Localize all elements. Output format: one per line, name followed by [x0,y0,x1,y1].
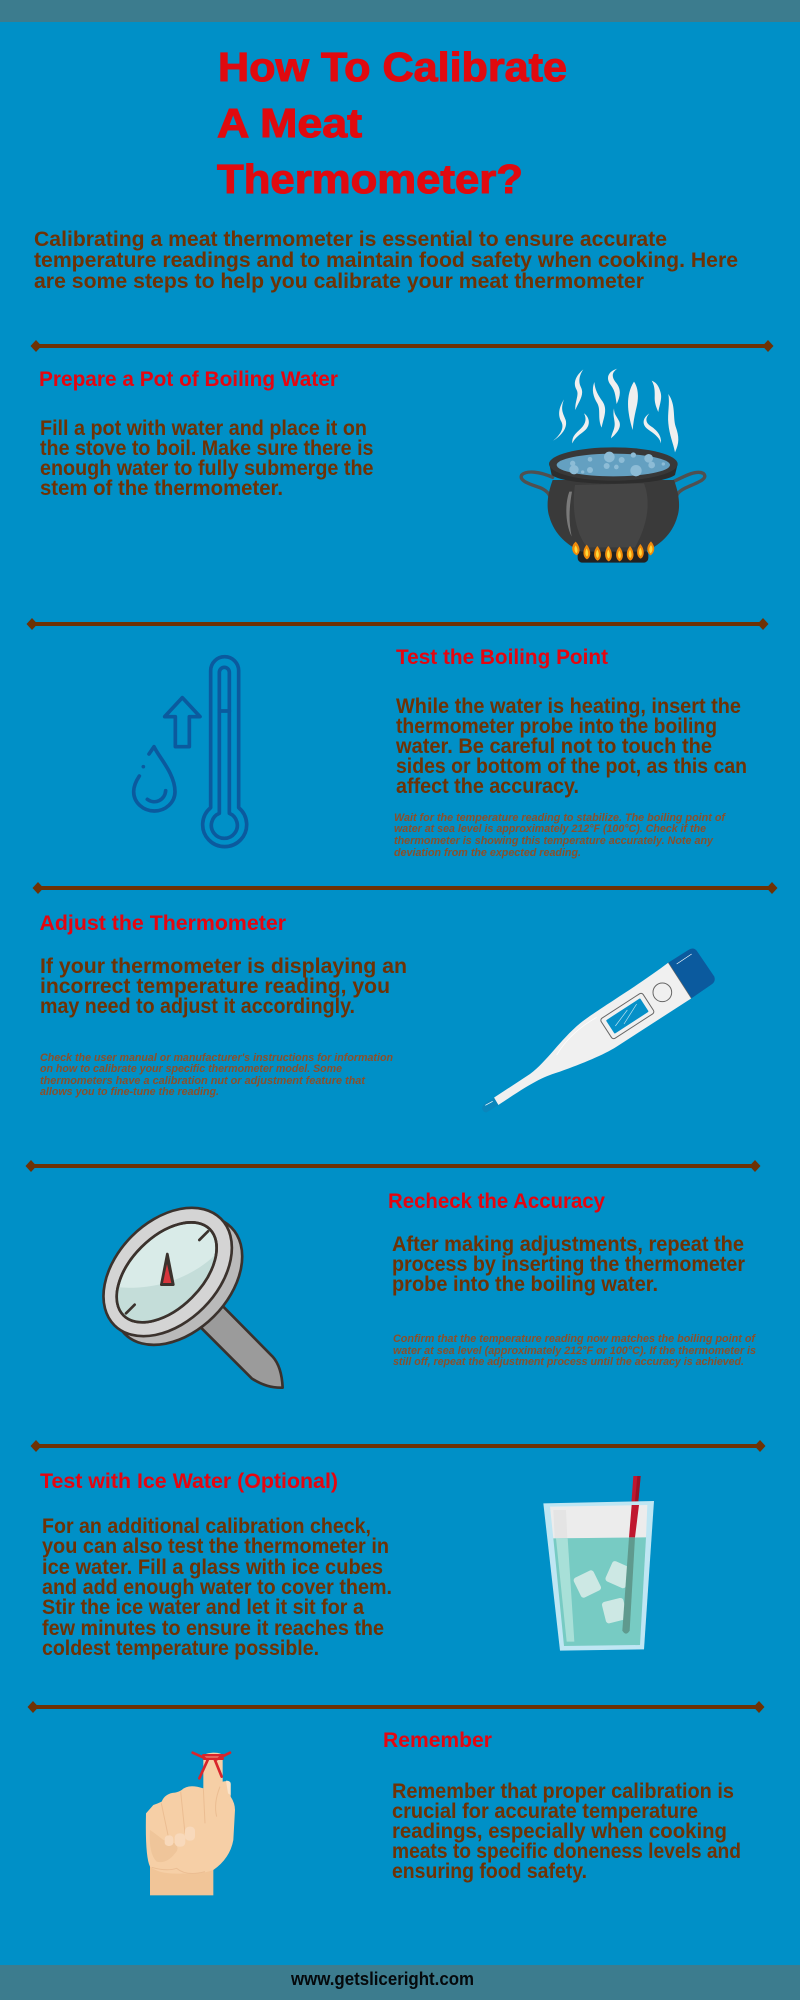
text block: step 3 body: If your thermometer is displaying an [40,955,407,978]
text block: step 4 small note: water at sea level (approximately 212°F or 100°C). If the thermometer is [393,1345,756,1357]
text block: step 6 body: readings, especially when cooking [392,1820,727,1843]
text block: step 5 body: few minutes to ensure it reaches the [42,1617,384,1640]
text block: step 2 small note: deviation from the expected reading. [394,847,581,859]
text block: step 4 body [392,1233,745,1296]
text block: step 4 small note [393,1333,756,1368]
text block: step 3 small note: Check the user manual or manufacturer's instructions for information [40,1052,393,1064]
panel: step 1 prepare boiling water [39,368,705,563]
text block: step 2 small note: thermometer is showing this temperature accurately. Note any [394,835,714,847]
text block: step 6 body [392,1780,741,1883]
text block: step 5 body: coldest temperature possible. [42,1637,319,1660]
heading: remember: Remember [383,1729,492,1752]
text block: step 6 body: Remember that proper calibration is [392,1780,734,1803]
text block: step 1 body: Fill a pot with water and place it on [40,417,367,440]
intro text [34,228,738,293]
icon: boiling pot [521,369,705,563]
text block: step 4 small note: still off, repeat the adjustment process until the accuracy is achieved. [393,1356,744,1368]
panel: step 6 remember [146,1729,741,1895]
icon: dial meat thermometer [102,1206,284,1389]
text block: step 2 body: affect the accuracy. [396,775,579,798]
text block: step 3 small note: allows you to fine-tune the reading. [40,1086,219,1098]
text block: step 3 body [40,955,407,1018]
text block: step 2 body: thermometer probe into the boiling [396,715,717,738]
text block: step 2 body: While the water is heating, insert the [396,695,741,718]
footer bar: www.getsliceright.com [290,1969,474,1989]
text block: step 5 body: you can also test the thermometer in [42,1535,389,1558]
text block: step 2 small note [394,812,726,859]
text block: step 1 body: the stove to boil. Make sure there is [40,437,374,460]
title: How To Calibrate [218,44,567,90]
text block: step 3 small note: thermometers have a calibration nut or adjustment feature that [40,1075,366,1087]
icon: hand with string on finger [146,1753,235,1895]
text block: step 5 body: ice water. Fill a glass with ice cubes [42,1556,383,1579]
text block: step 5 body: and add enough water to cover them. [42,1576,392,1599]
heading: test with ice water: Test with Ice Water (Optional) [40,1470,338,1493]
panel: step 2 test the boiling point [134,646,747,859]
text block: step 1 body: enough water to fully submerge the [40,457,374,480]
heading: test the boiling point: Test the Boiling Point [396,646,608,669]
footer bar [0,1965,800,2000]
heading: recheck the accuracy: Recheck the Accuracy [388,1190,605,1213]
icon: glass of ice water with straw [543,1476,654,1651]
panel: step 4 recheck the accuracy [79,1183,756,1388]
heading: prepare a pot: Prepare a Pot of Boiling Water [39,368,338,391]
text block: step 6 body: crucial for accurate temperature [392,1800,698,1823]
text block: step 2 small note: Wait for the temperature reading to stabilize. The boiling point of [394,812,726,824]
text block: step 2 body: sides or bottom of the pot, as this can [396,755,747,778]
text block: step 1 body [40,417,374,500]
title [217,44,567,202]
panel: step 5 test with ice water [40,1470,654,1660]
text block: step 4 small note: Confirm that the temperature reading now matches the boiling point of [393,1333,756,1345]
text block: step 2 body: water. Be careful not to touch the [395,735,712,758]
icon: digital thermometer [482,948,715,1112]
icon: thermometer with drop and arrow [134,657,247,847]
text block: step 4 body: After making adjustments, repeat the [392,1233,744,1256]
text block: step 5 body: Stir the ice water and let it sit for a [42,1596,364,1619]
text block: step 4 body: probe into the boiling water. [392,1273,658,1296]
title: A Meat [217,100,362,146]
panel: step 3 adjust the thermometer [40,912,715,1112]
text block: step 1 body: stem of the thermometer. [40,477,283,500]
text block: step 4 body: process by inserting the thermometer [392,1253,745,1276]
heading: adjust the thermometer: Adjust the Thermometer [40,912,286,935]
intro text: temperature readings and to maintain food safety when cooking. Here [34,249,738,272]
intro text: are some steps to help you calibrate your meat thermometer [34,270,644,293]
text block: step 6 body: ensuring food safety. [392,1860,587,1883]
text block: step 5 body [42,1515,392,1660]
title: Thermometer? [217,156,523,202]
text block: step 3 small note: on how to calibrate your specific thermometer model. Some [40,1063,342,1075]
text block: step 6 body: meats to specific doneness levels and [392,1840,741,1863]
text block: step 3 body: may need to adjust it accordingly. [40,995,355,1018]
intro text: Calibrating a meat thermometer is essential to ensure accurate [34,228,667,251]
text block: step 2 body [395,695,747,798]
text block: step 5 body: For an additional calibration check, [42,1515,371,1538]
text block: step 3 body: incorrect temperature reading, you [40,975,390,998]
text block: step 3 small note [40,1052,393,1098]
text block: step 2 small note: water at sea level is approximately 212°F (100°C). Check if the [394,823,706,835]
